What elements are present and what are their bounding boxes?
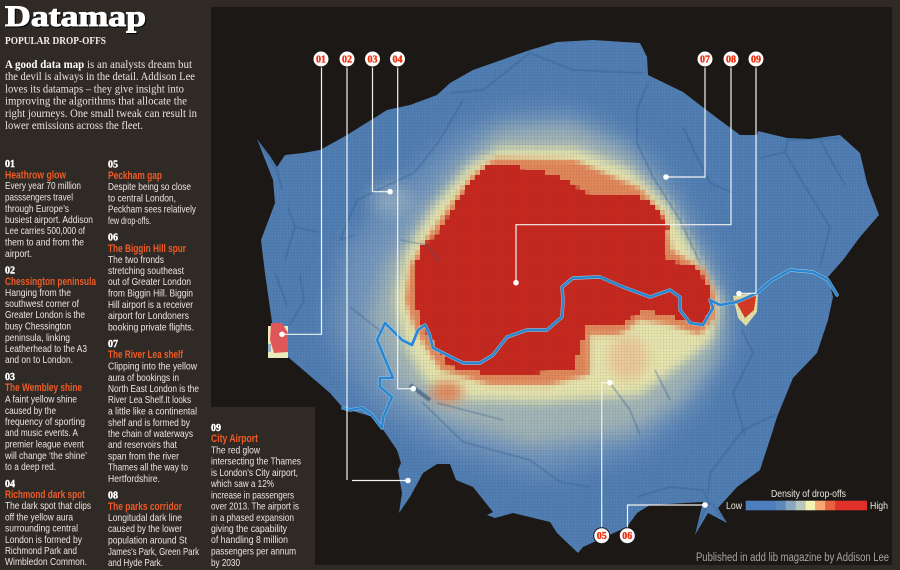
text block 09 City Airport: by 2030 — [211, 558, 240, 569]
text block 01 Heathrow glow: passsengers travel — [5, 192, 73, 204]
text block 06 The Biggin Hill spur: 06 — [108, 232, 118, 244]
text block 07 The River Lea shelf: Hertfordshire. — [108, 474, 160, 485]
text block 08 The parks corridor: The parks corridor — [108, 501, 182, 513]
subtitle: POPULAR DROP-OFFS — [5, 36, 106, 47]
callout 08: 08 — [726, 54, 736, 66]
text block 08 The parks corridor: population around St — [108, 536, 187, 546]
text block 07 The River Lea shelf: a little like a continental — [108, 406, 197, 418]
text block 06 The Biggin Hill spur: The two fronds — [108, 255, 164, 266]
text block 04 Richmond dark spot: surrounding central — [5, 524, 78, 534]
text block 07 The River Lea shelf: span from the river — [108, 452, 179, 462]
text block 04 Richmond dark spot: 04 — [5, 479, 16, 490]
River Thames — [343, 270, 837, 428]
text block 05 Peckham gap: Despite being so close — [108, 182, 191, 193]
text block 01 Heathrow glow: through Europe’s — [5, 204, 69, 215]
callout 09: 09 — [751, 54, 761, 66]
text block 03 The Wembley shine: to a deep red. — [5, 462, 56, 473]
text block 01 Heathrow glow: Every year 70 million — [5, 181, 81, 192]
callout 05 — [594, 380, 613, 544]
legend: density of drop-offs: Density of drop-offs — [771, 489, 846, 500]
text block 08 The parks corridor: caused by the lower — [108, 524, 182, 535]
text block 06 The Biggin Hill spur: out of Greater London — [108, 277, 191, 288]
density veins — [257, 53, 845, 533]
text block 09 City Airport: increase in passengers — [211, 490, 294, 502]
text block 06 The Biggin Hill spur: Hill airport is a receiver — [108, 300, 193, 311]
text block 05 Peckham gap: 05 — [108, 160, 118, 170]
callout 06: 06 — [622, 531, 632, 542]
text block 04 Richmond dark spot — [5, 479, 91, 568]
text block 02 Chessington peninsula — [5, 266, 96, 366]
text block 01 Heathrow glow — [5, 159, 93, 260]
text block 07 The River Lea shelf: The River Lea shelf — [108, 349, 183, 361]
text block 07 The River Lea shelf: Clipping into the yellow — [108, 362, 197, 372]
callout 09 — [736, 51, 764, 296]
title: Datamap — [5, 0, 146, 33]
text block 01 Heathrow glow: Lee carries 500,000 of — [5, 226, 85, 237]
text block 09 City Airport: over 2013. The airport is — [211, 502, 299, 512]
text block 09 City Airport: which saw a 12% — [210, 479, 274, 490]
text block 09 City Airport: in a phased expansion — [211, 513, 294, 524]
text block 02 Chessington peninsula: southwest corner of — [5, 299, 79, 310]
legend: density of drop-offs: Low — [726, 501, 742, 512]
text block 05 Peckham gap — [108, 160, 197, 227]
text block 02 Chessington peninsula: busy Chessington — [5, 322, 71, 332]
text block 06 The Biggin Hill spur: The Biggin Hill spur — [108, 243, 186, 255]
text block 09 City Airport: The red glow — [211, 446, 260, 456]
text block 04 Richmond dark spot: Wimbledon Common. — [5, 557, 87, 568]
Heathrow glow hot spot — [268, 323, 288, 358]
text block 03 The Wembley shine: 03 — [5, 372, 15, 383]
intro paragraph — [5, 58, 197, 132]
text block 09 City Airport — [210, 423, 301, 569]
text block 09 City Airport: passengers per annum — [211, 546, 296, 558]
text block 08 The parks corridor: 08 — [108, 490, 118, 502]
text block 09 City Airport: intersecting the Thames — [211, 456, 301, 468]
text block 08 The parks corridor: and Hyde Park. — [108, 558, 163, 569]
intro paragraph: the devil is always in the detail. Addison Lee — [5, 70, 195, 83]
text block 01 Heathrow glow: them to and from the — [5, 238, 84, 248]
text block 09 City Airport: of handling 8 million — [211, 535, 288, 546]
text block 03 The Wembley shine: The Wembley shine — [5, 382, 82, 394]
text block 02 Chessington peninsula: Chessington peninsula — [5, 276, 96, 288]
callout 07: 07 — [700, 54, 710, 66]
intro paragraph: right journeys. One small tweak can result in — [5, 107, 197, 120]
map base — [257, 40, 879, 553]
text block 01 Heathrow glow: airport. — [5, 249, 32, 260]
mesh texture — [257, 40, 879, 553]
callout 05: 05 — [597, 531, 607, 542]
text block 09 City Airport: City Airport — [211, 433, 258, 445]
text block 05 Peckham gap: Peckham sees relatively — [108, 204, 197, 216]
callout 04 — [390, 51, 416, 392]
callout 01: 01 — [316, 54, 326, 66]
text block 05 Peckham gap: few drop-offs. — [108, 216, 151, 227]
text block 04 Richmond dark spot: Richmond dark spot — [5, 489, 85, 501]
text block 03 The Wembley shine: A faint yellow shine — [5, 394, 77, 406]
text block 07 The River Lea shelf: North East London is the — [108, 384, 199, 395]
intro paragraph: improving the algorithms that allocate the — [5, 95, 187, 108]
text block 07 The River Lea shelf: the chain of waterways — [108, 429, 193, 440]
text block 01 Heathrow glow: 01 — [5, 159, 15, 170]
callout 04: 04 — [392, 54, 402, 66]
text block 08 The parks corridor: James’s Park, Green Park — [108, 547, 200, 558]
text block 03 The Wembley shine — [4, 372, 87, 473]
text block 04 Richmond dark spot: The dark spot that clips — [5, 501, 91, 512]
text block 06 The Biggin Hill spur: airport for Londoners — [108, 311, 189, 322]
text block 02 Chessington peninsula: and on to London. — [5, 355, 73, 366]
callout 03: 03 — [368, 54, 378, 66]
text block 07 The River Lea shelf: 07 — [108, 339, 118, 350]
text block 09 City Airport: 09 — [211, 423, 221, 434]
text block 06 The Biggin Hill spur: from Biggin Hill. Biggin — [108, 288, 193, 300]
text block 03 The Wembley shine: caused by the — [5, 406, 56, 417]
text block 07 The River Lea shelf: and reservoirs that — [108, 440, 177, 451]
callout 06 — [619, 502, 708, 544]
text block 02 Chessington peninsula: Hanging from the — [5, 288, 71, 299]
text block 03 The Wembley shine: and music events. A — [5, 428, 78, 439]
text block 04 Richmond dark spot: London is formed by — [5, 535, 83, 546]
text block 03 The Wembley shine: will change ‘the shine’ — [4, 451, 87, 462]
intro paragraph: loves its datamaps – they give insight into — [5, 82, 184, 96]
text block 02 Chessington peninsula: Greater London is the — [5, 310, 85, 321]
callout 02 — [339, 51, 411, 483]
text block 02 Chessington peninsula: Leatherhead to the A3 — [5, 344, 87, 355]
text block 08 The parks corridor — [108, 490, 200, 569]
text block 06 The Biggin Hill spur: booking private flights. — [108, 322, 194, 334]
callout 07 — [663, 51, 713, 180]
text block 06 The Biggin Hill spur: stretching southeast — [108, 266, 184, 277]
intro paragraph: A good data map is an analysts dream but — [5, 58, 193, 71]
callout 08 — [513, 51, 739, 286]
map panel background — [211, 7, 892, 565]
text block 09 City Airport: is London’s City airport, — [211, 468, 298, 479]
text block 05 Peckham gap: Peckham gap — [108, 170, 162, 182]
text block 04 Richmond dark spot: off the yellow aura — [5, 512, 73, 524]
legend: density of drop-offs: High — [870, 501, 888, 512]
text block 09 City Airport: giving the capability — [211, 524, 288, 535]
intro paragraph: lower emissions across the fleet. — [5, 119, 143, 132]
text block 02 Chessington peninsula: peninsula, linking — [5, 333, 70, 344]
callout 03 — [364, 51, 393, 194]
text block 03 The Wembley shine: premier league event — [5, 440, 84, 450]
text block 07 The River Lea shelf — [108, 339, 199, 485]
callout 02: 02 — [342, 54, 352, 66]
City Airport glow — [733, 292, 758, 326]
text block 07 The River Lea shelf: River Lea Shelf.It looks — [108, 395, 191, 406]
map: London drop-off density — [257, 40, 879, 553]
text block 01 Heathrow glow: busiest airport. Addison — [5, 215, 93, 226]
text block 06 The Biggin Hill spur — [108, 232, 194, 334]
text block 01 Heathrow glow: Heathrow glow — [5, 169, 67, 181]
text block 03 The Wembley shine: frequency of sporting — [5, 417, 85, 428]
density heat layers — [257, 40, 879, 553]
callout 01 — [279, 51, 329, 337]
text block 02 Chessington peninsula: 02 — [5, 266, 15, 276]
text block 05 Peckham gap: to central London, — [108, 194, 176, 204]
text block 08 The parks corridor: Longitudal dark line — [108, 513, 182, 524]
text block 04 Richmond dark spot: Richmond Park and — [5, 546, 77, 557]
text block 07 The River Lea shelf: Thames all the way to — [108, 462, 188, 474]
text block 07 The River Lea shelf: aura of bookings in — [108, 373, 179, 384]
legend: density of drop-offs — [726, 489, 888, 512]
text block 07 The River Lea shelf: shelf and is formed by — [108, 418, 191, 429]
